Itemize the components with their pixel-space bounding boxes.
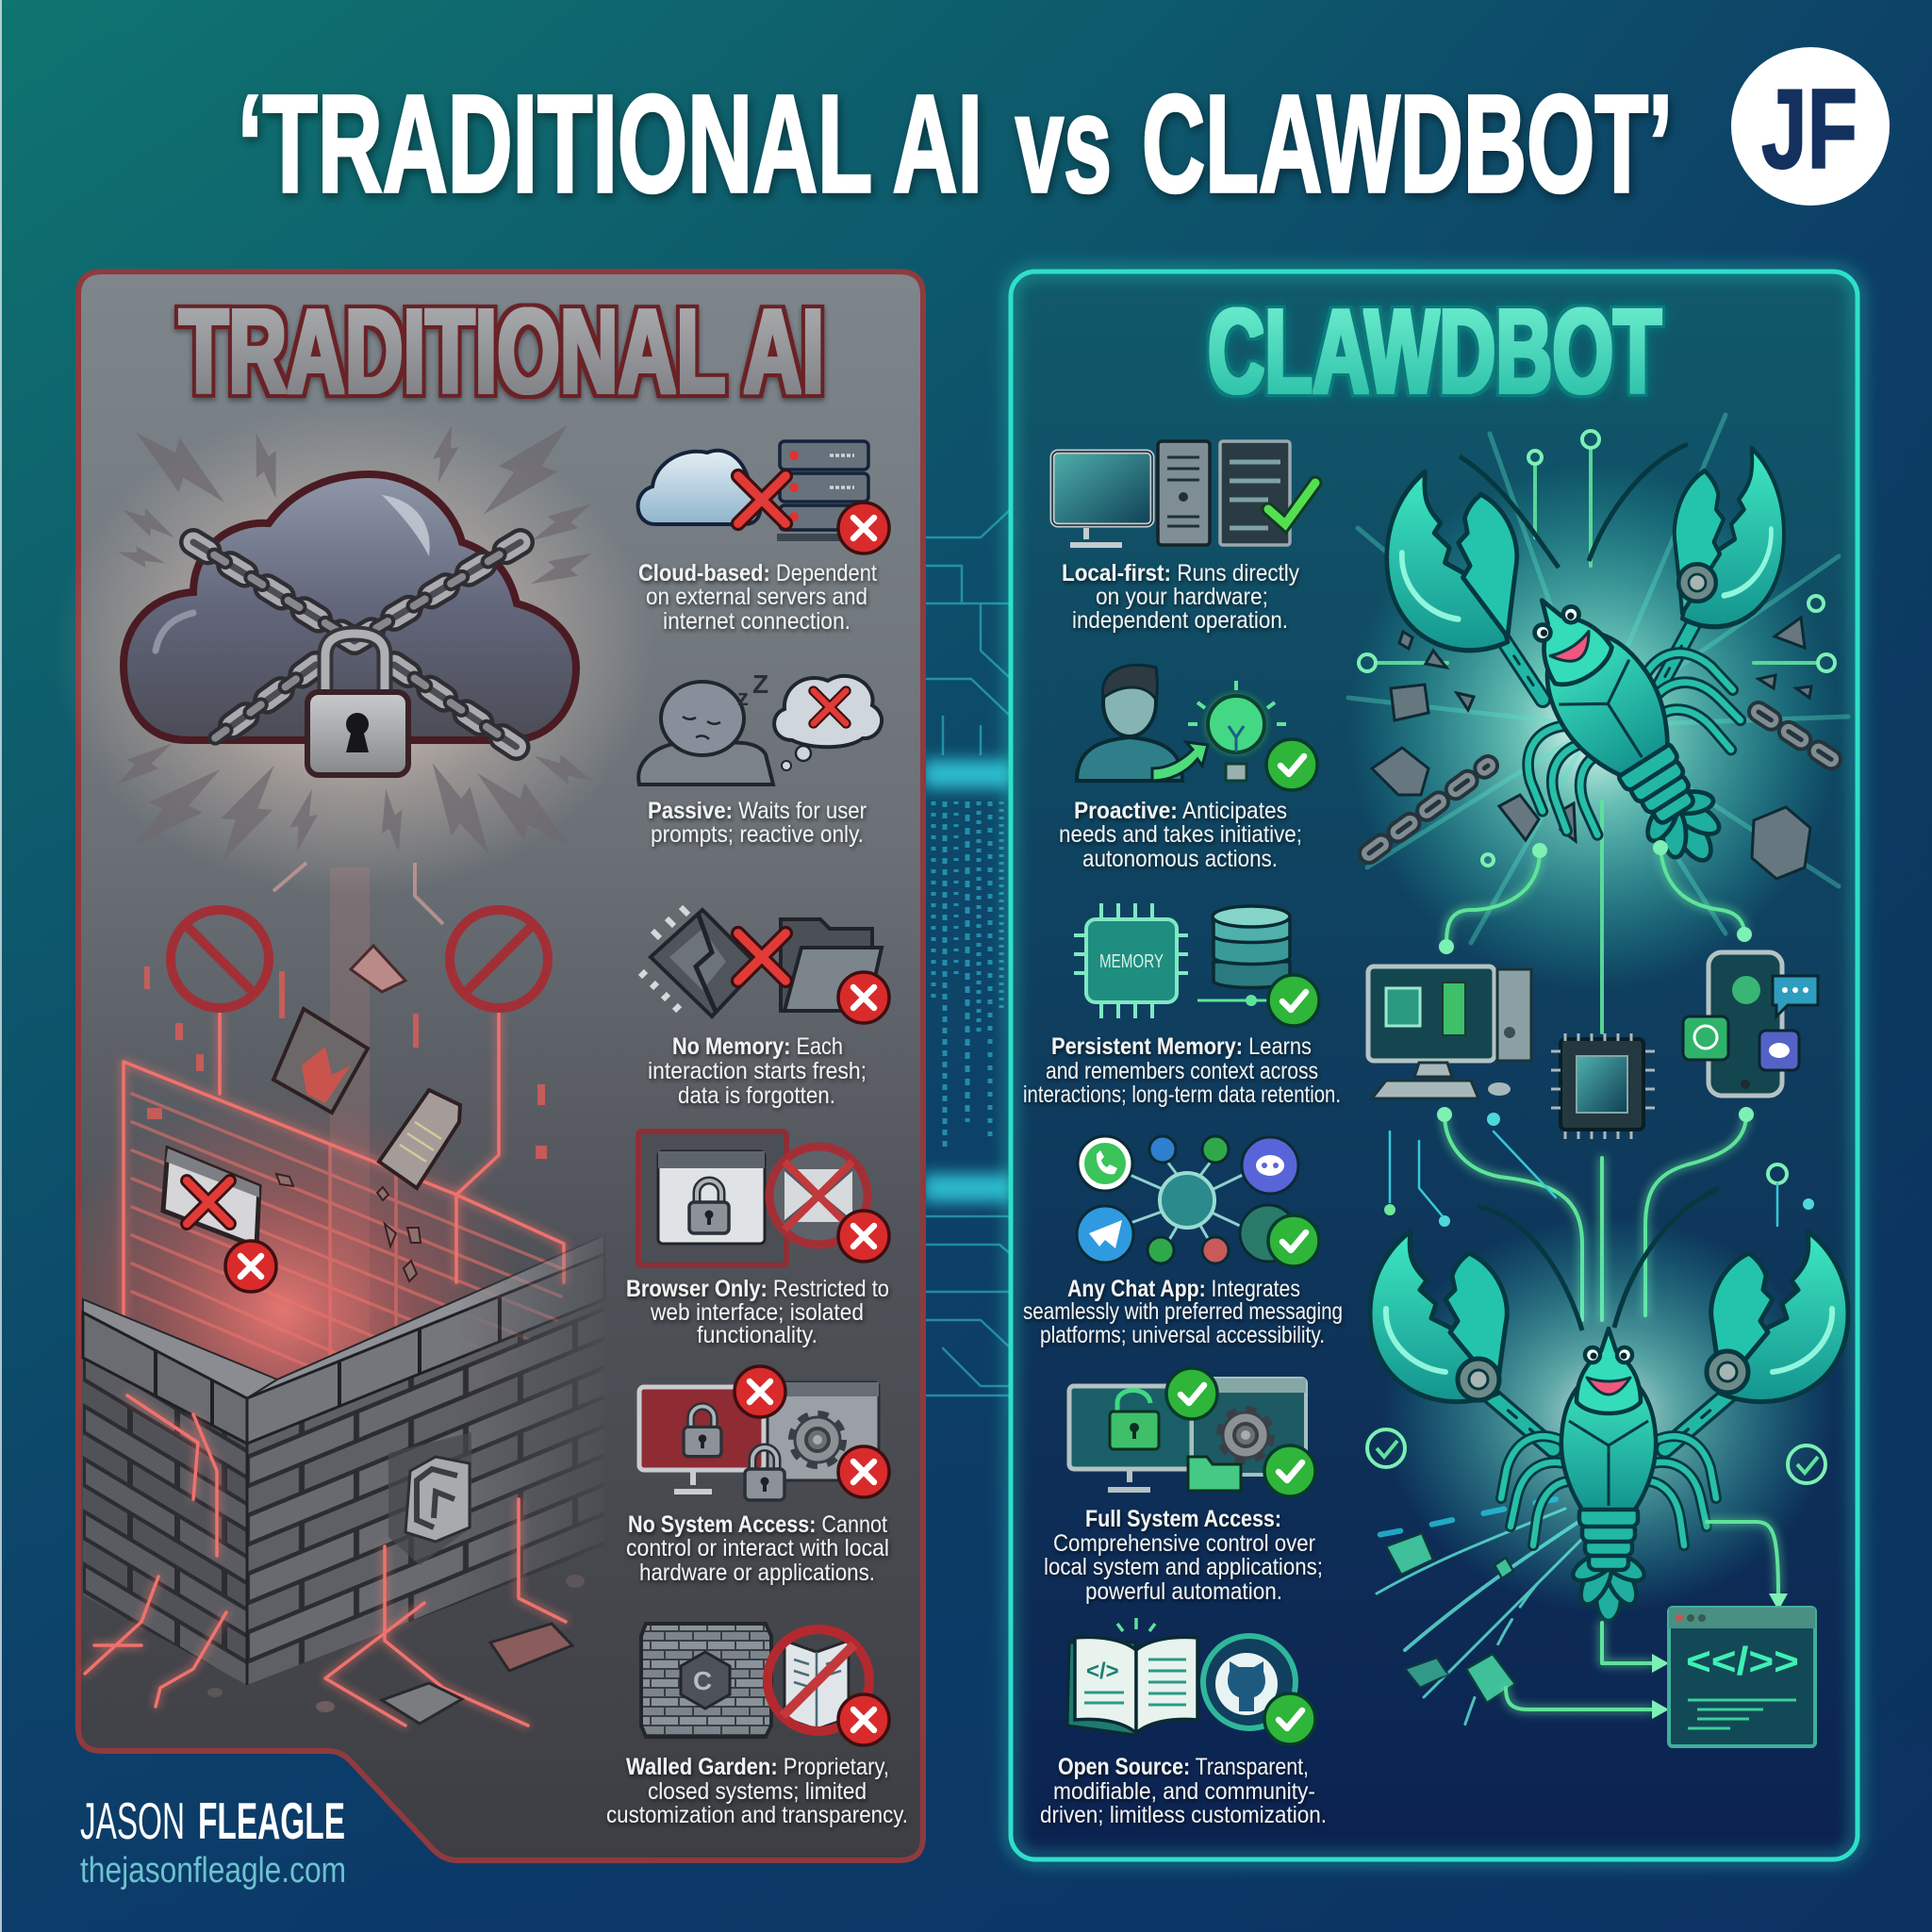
lobster mascot one xyxy=(1387,444,1802,919)
footer: author credit: thejasonfleagle.com xyxy=(80,1851,346,1891)
icon: desktop and server with check xyxy=(1052,441,1315,545)
text: any chat app: platforms; universal accessibility. xyxy=(1040,1322,1325,1348)
text: local-first: on your hardware; xyxy=(1096,584,1268,610)
text: proactive: needs and takes initiative; xyxy=(1059,821,1302,848)
text: persistent memory: interactions; long-term data retention. xyxy=(1023,1082,1341,1108)
icon: desktop computer xyxy=(1368,966,1531,1098)
icon: broken chip debris xyxy=(207,1575,585,1724)
icon: sleeping person and thought bubble: z xyxy=(737,685,749,711)
icon: shield logo on wall xyxy=(388,1432,471,1565)
icon: falling document xyxy=(379,1090,460,1188)
text: open source: Open Source: Transparent, xyxy=(1058,1754,1309,1780)
text: no memory: data is forgotten. xyxy=(678,1082,835,1109)
icon: chat app network xyxy=(1077,1136,1319,1266)
item: no system access xyxy=(626,1366,889,1586)
text: browser only: web interface; isolated xyxy=(650,1299,864,1326)
item: proactive xyxy=(1059,665,1317,872)
icon: sleeping person and thought bubble xyxy=(638,669,882,784)
text: cloud-based: internet connection. xyxy=(663,608,850,635)
title: ‘TRADITIONAL AI xyxy=(238,67,983,222)
logo: JF badge: JF xyxy=(1761,66,1858,192)
central circuit backdrop between panels xyxy=(923,509,1013,1395)
item: browser only xyxy=(626,1131,889,1348)
text: proactive: autonomous actions. xyxy=(1082,846,1278,872)
icon: broken chip and folder xyxy=(640,907,889,1023)
text: full system access: local system and applications; xyxy=(1044,1554,1323,1580)
icon: sleeping person and thought bubble: Z xyxy=(752,669,768,699)
text: walled garden: customization and transparency. xyxy=(606,1802,908,1828)
text: no system access xyxy=(626,1511,889,1586)
icon: processor chip xyxy=(1551,1033,1655,1139)
logo: JF badge xyxy=(1731,47,1890,206)
text: walled garden: Walled Garden: Proprietary, xyxy=(626,1754,889,1780)
icon: error browser window xyxy=(163,1148,276,1292)
text: local-first: Local-first: Runs directly xyxy=(1062,560,1299,586)
item: any chat app xyxy=(1023,1136,1343,1348)
item: cloud-based xyxy=(638,441,889,635)
item: open source xyxy=(1040,1618,1327,1828)
text: proactive xyxy=(1059,798,1302,872)
icon: envelope falling xyxy=(351,946,405,992)
text: open source: driven; limitless customization. xyxy=(1040,1802,1327,1828)
text: no system access: control or interact with local xyxy=(626,1535,889,1561)
icon: cloud and server xyxy=(638,441,889,553)
icon: unlocked monitor, settings and folder xyxy=(1069,1368,1315,1496)
panel: clawdbot xyxy=(1011,272,1858,1859)
icon: code window with arrows xyxy=(1506,1522,1815,1746)
text: passive: prompts; reactive only. xyxy=(651,821,864,848)
text: open source: modifiable, and community- xyxy=(1053,1778,1315,1805)
text: any chat app: Any Chat App: Integrates xyxy=(1067,1276,1300,1302)
text: any chat app: seamlessly with preferred messaging xyxy=(1023,1298,1343,1325)
icon: prohibition signs xyxy=(171,910,548,1008)
title: vs xyxy=(1016,67,1112,222)
cracks: glowing red fissures xyxy=(85,1395,566,1726)
heading: TRADITIONAL AI: TRADITIONAL AI xyxy=(179,285,824,418)
debris: rocks and broken chains xyxy=(1372,618,1811,879)
text: full system access: Comprehensive control over xyxy=(1053,1530,1315,1557)
text: local-first xyxy=(1062,560,1299,634)
icon: code window with arrows: <</>> xyxy=(1686,1639,1799,1683)
text: no system access: No System Access: Cannot xyxy=(628,1511,887,1538)
illustration: brick wall xyxy=(83,1235,604,1685)
text: cloud-based: on external servers and xyxy=(646,584,867,610)
icon: open book and github badge: </> xyxy=(1086,1659,1119,1684)
item: walled garden xyxy=(606,1624,908,1828)
text: full system access: Full System Access: xyxy=(1085,1506,1281,1532)
text: no memory xyxy=(648,1033,867,1109)
panel: traditional AI xyxy=(38,272,923,1860)
text: browser only: Browser Only: Restricted to xyxy=(626,1276,889,1302)
footer: author credit: FLEAGLE xyxy=(198,1792,345,1850)
item: local-first xyxy=(1052,441,1315,634)
text: open source xyxy=(1040,1754,1327,1828)
illustration: upper lobster breaking chains xyxy=(1348,415,1848,1032)
illustration: firewall scene with falling data xyxy=(38,863,604,1726)
icon: walled logo and blocked book: C xyxy=(693,1666,712,1695)
text: passive: Passive: Waits for user xyxy=(648,798,867,824)
text: passive xyxy=(648,798,867,848)
text: persistent memory: Persistent Memory: Learns xyxy=(1051,1033,1312,1060)
icon: torn page xyxy=(273,1009,368,1113)
text: browser only xyxy=(626,1276,889,1348)
text: no system access: hardware or applications. xyxy=(639,1560,875,1586)
footer: author credit: JASON xyxy=(80,1792,185,1850)
icon: memory chip and database: MEMORY xyxy=(1099,951,1164,972)
icon: walled logo and blocked book xyxy=(641,1624,889,1745)
illustration: lower lobster xyxy=(1367,1188,1848,1735)
text: browser only: functionality. xyxy=(697,1322,817,1348)
item: full system access xyxy=(1044,1368,1323,1605)
icon: open book and github badge xyxy=(1067,1618,1315,1744)
illustration: chained cloud xyxy=(52,405,655,896)
text: any chat app xyxy=(1023,1276,1343,1348)
circuit nodes around lobster xyxy=(1359,431,1835,1032)
text: no memory: No Memory: Each xyxy=(672,1033,843,1060)
icon: phone with chat apps xyxy=(1683,952,1818,1096)
item: persistent memory xyxy=(1023,903,1341,1108)
text: walled garden xyxy=(606,1754,908,1828)
lobster mascot two xyxy=(1370,1231,1848,1621)
item: no memory xyxy=(640,907,889,1109)
text: persistent memory: and remembers context across xyxy=(1046,1058,1318,1084)
text: persistent memory xyxy=(1023,1033,1341,1108)
text: local-first: independent operation. xyxy=(1072,607,1288,634)
text: no memory: interaction starts fresh; xyxy=(648,1058,867,1084)
text: proactive: Proactive: Anticipates xyxy=(1074,798,1287,824)
icon: memory chip and database xyxy=(1074,903,1319,1026)
text: cloud-based: Cloud-based: Dependent xyxy=(638,560,877,586)
icon: locked browser and blocked mail xyxy=(638,1131,889,1265)
text: cloud-based xyxy=(638,560,877,635)
icon: locked monitor and settings xyxy=(639,1366,889,1500)
item: passive xyxy=(638,669,882,848)
footer: author credit xyxy=(80,1792,346,1891)
text: full system access xyxy=(1044,1506,1323,1605)
data streams shooting to lower left xyxy=(1367,1499,1593,1735)
text: full system access: powerful automation. xyxy=(1085,1578,1282,1605)
text: walled garden: closed systems; limited xyxy=(648,1778,867,1805)
illustration: computer, chip and phone with circuit links xyxy=(1368,840,1818,1320)
icon: person, lightbulb and check xyxy=(1077,665,1317,790)
heading: CLAWDBOT: CLAWDBOT xyxy=(1208,285,1661,418)
